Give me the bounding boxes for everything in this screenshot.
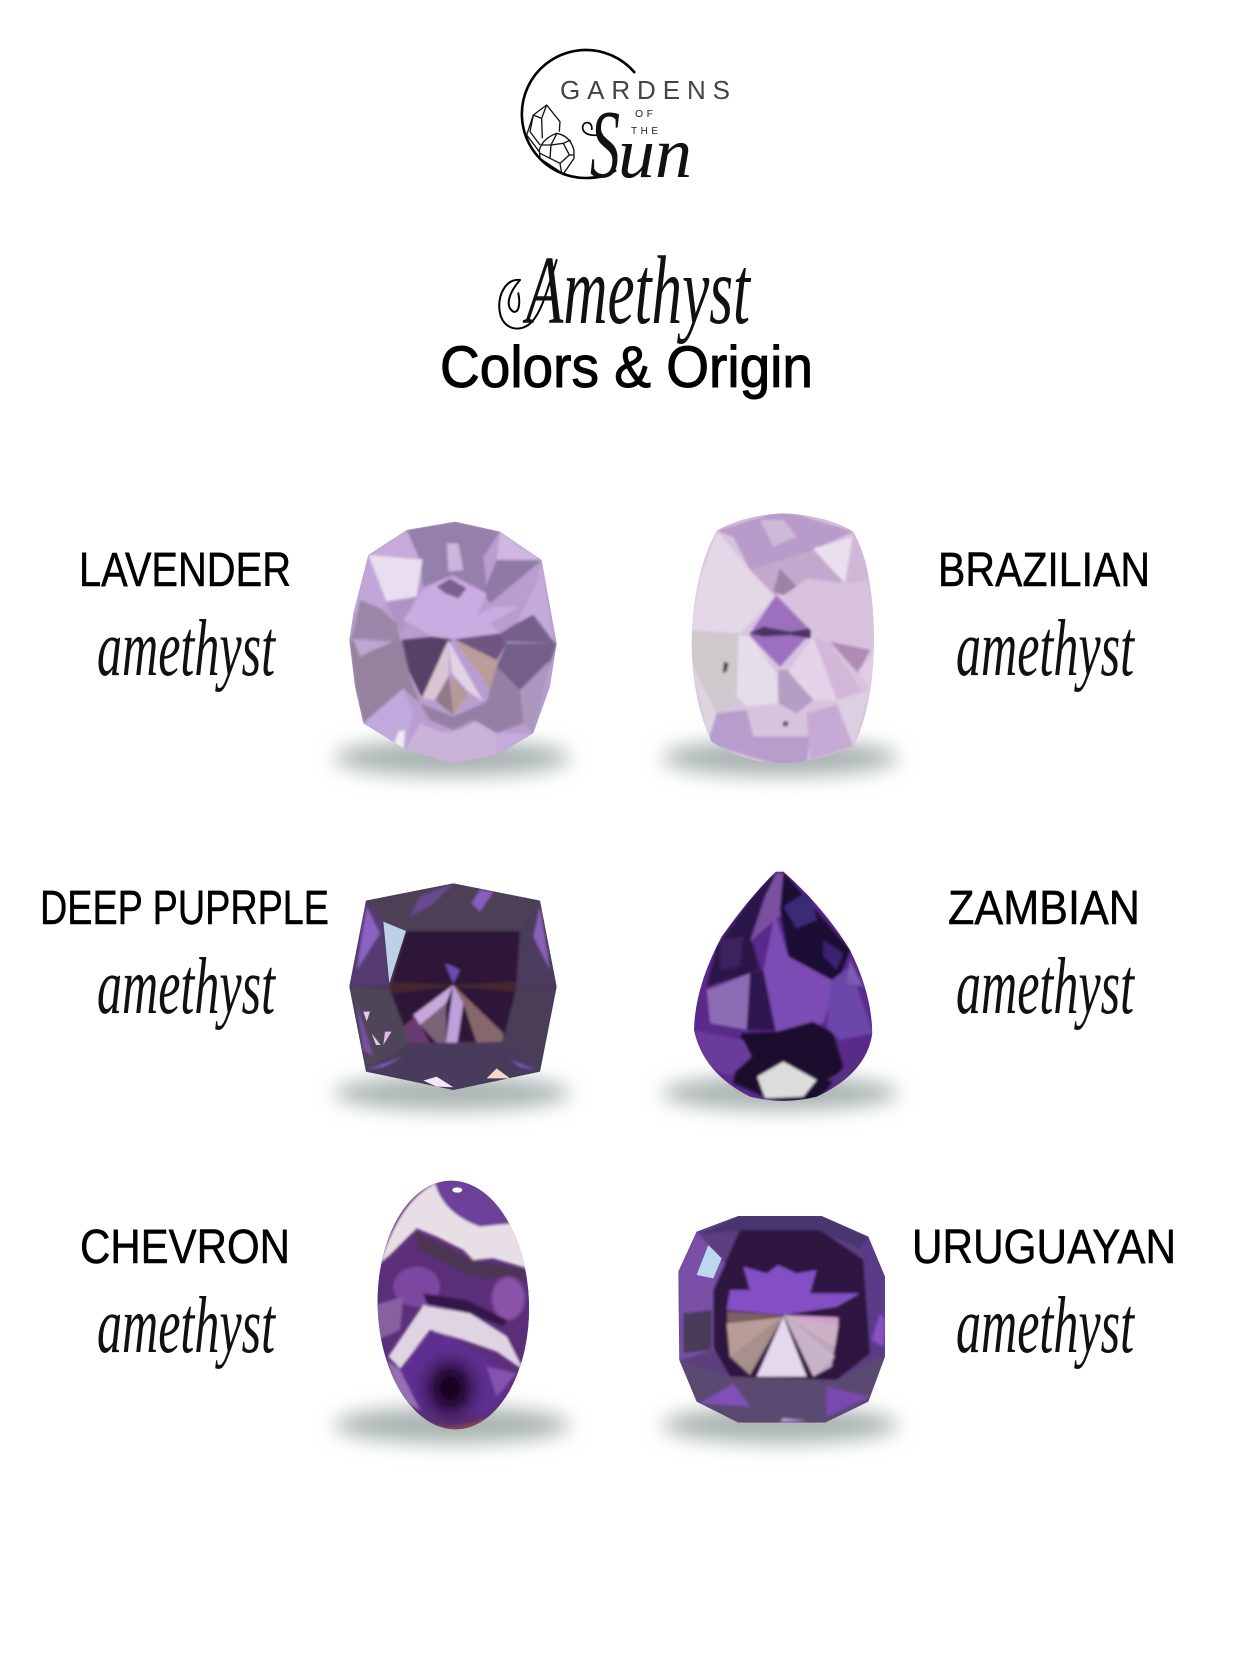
gem shadow [334,1407,570,1443]
title: Amethyst [499,237,751,344]
logo word THE: THE [631,126,658,137]
label: LAVENDER: LAVENDER [79,544,291,597]
panel: Deep purple amethyst label [40,882,329,1031]
gem shadow [662,1076,898,1110]
title flourish [499,260,557,329]
panel: Deep purple gem [334,877,570,1110]
logo wordmark GARDENS: GARDENS [560,75,730,105]
title text: Amethyst [522,237,751,344]
label: URUGUAYAN: URUGUAYAN [912,1221,1176,1274]
script: amethyst: amethyst [956,1282,1135,1370]
gem highlights [363,922,510,1087]
panel: Lavender amethyst label [79,544,291,693]
panel: Zambian gem [662,870,898,1110]
heading: Colors & Origin: Colors & Origin [440,335,813,400]
panel: Uruguayan gem [662,1210,898,1443]
panel: Uruguayan amethyst label [912,1221,1176,1370]
gem: chevron oval cabochon [378,1180,530,1430]
logo script un: un [618,113,692,193]
label: BRAZILIAN: BRAZILIAN [938,544,1150,597]
gem: deep purple cut [349,883,557,1090]
gem: brazilian cushion cut [692,513,874,764]
panel: Zambian amethyst label [948,882,1140,1031]
script: amethyst: amethyst [97,1282,276,1370]
label: CHEVRON: CHEVRON [80,1221,290,1274]
S flourish [583,123,603,135]
panel: Lavender gem [334,513,570,776]
logo word OF: OF [635,108,653,120]
script: amethyst: amethyst [956,943,1135,1031]
gem: uruguayan cushion cut [678,1216,885,1423]
logo ring [522,50,635,178]
gem: lavender cut [349,522,556,764]
panel: Chevron gem [334,1177,570,1443]
label: ZAMBIAN: ZAMBIAN [948,882,1140,935]
icon: crystals [527,105,603,174]
script: amethyst: amethyst [956,605,1135,693]
gem shadow [662,1407,898,1443]
gem shadow [662,740,898,776]
panel: Brazilian amethyst label [938,544,1150,693]
gem: zambian pear cut [694,872,872,1101]
script: amethyst: amethyst [97,605,276,693]
gem shadow [334,1076,570,1110]
script: amethyst: amethyst [97,943,276,1031]
logo script Sun: S [590,91,620,198]
pendant hole [452,1187,462,1193]
gem shadow [334,740,570,776]
label: DEEP PUPRPLE: DEEP PUPRPLE [40,882,329,935]
panel: Chevron amethyst label [80,1221,290,1370]
panel: Brazilian gem [662,507,898,776]
gem highlight [697,1245,722,1278]
logo: Gardens of the Sun [522,50,730,198]
